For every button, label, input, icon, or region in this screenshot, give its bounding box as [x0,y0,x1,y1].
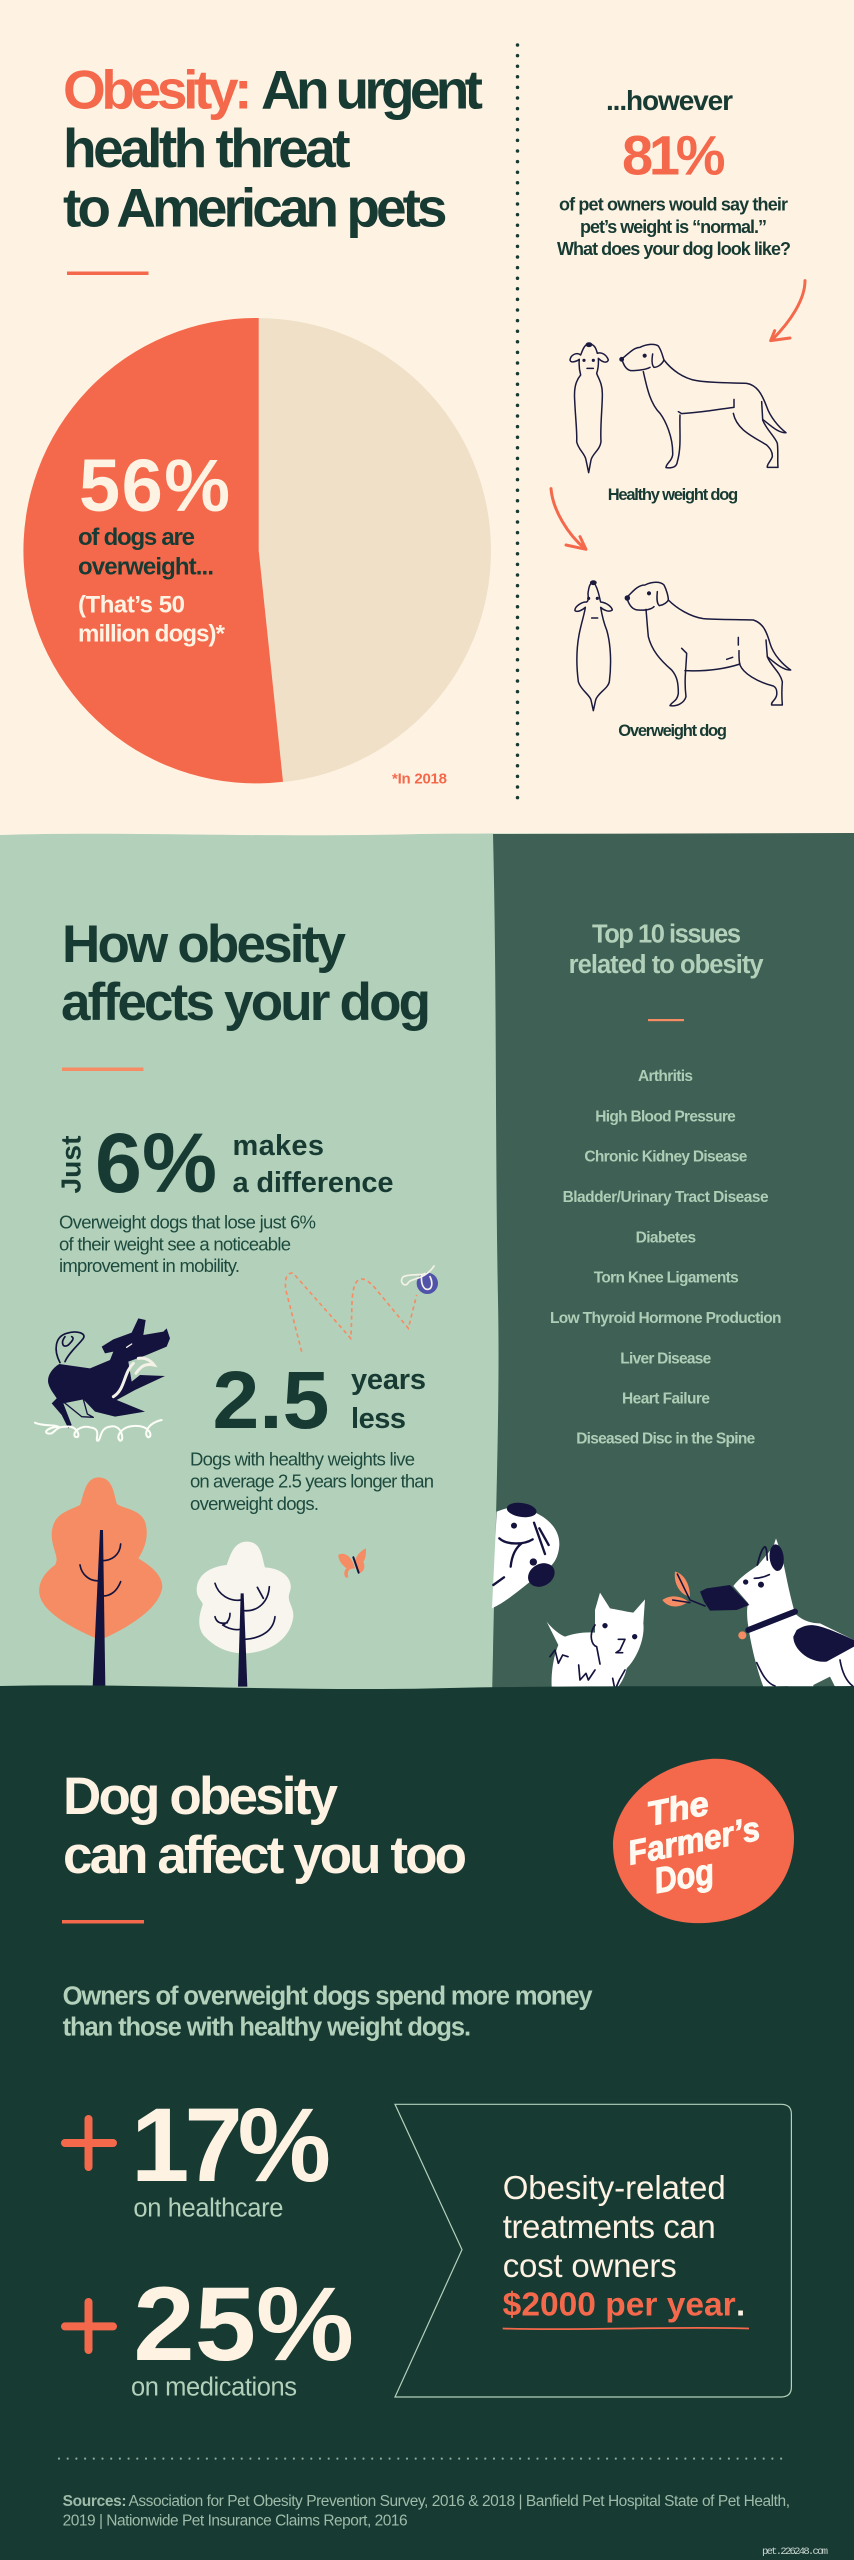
icon: overweight dog top view [575,581,612,711]
stat: +25 percent on medications: 25% [133,2266,354,2383]
icon: white cat [547,1593,645,1691]
panel: dog obesity can affect you too [0,1685,854,2560]
issues rule [648,1019,684,1021]
stat: +25 percent on medications: on medications [131,2374,297,2402]
stat: just 6 percent: Just [56,1136,86,1194]
body: 2.5 years: overweight dogs. [190,1493,319,1514]
watermark: pet.226248.com [762,2546,828,2558]
title [63,59,483,238]
title: An urgent [261,59,483,121]
sources: Association for Pet Obesity Prevention Survey, 2016 & 2018 | Banfield Pet Hospital State of Pet Health, [128,2493,790,2510]
heading rule [62,1068,144,1071]
stat: +17 percent on healthcare: on healthcare [133,2195,283,2223]
title rule [67,272,148,275]
issues list [550,1068,782,1448]
callout box: . [736,2286,745,2322]
pie callout text: of dogs are [78,524,195,551]
stat: +25 percent on medications [65,2266,354,2402]
footnote: *In 2018 [392,770,447,788]
icon: healthy dog side view [620,344,786,468]
body: 2.5 years: on average 2.5 years longer than [190,1471,434,1492]
issues list: Diseased Disc in the Spine [576,1431,756,1448]
issues list: Liver Disease [620,1350,712,1367]
issues list: Bladder/Urinary Tract Disease [563,1189,769,1206]
icon: cream tree [197,1542,293,1687]
however text: of pet owners would say their [559,195,788,215]
illustrations: dogs and cat [492,1501,854,1691]
subheading: Owners of overweight dogs spend more money [63,1982,593,2010]
stat: +17 percent on healthcare [65,2087,331,2223]
icon: squiggle ground [35,1420,162,1441]
subheading [63,1982,593,2042]
dotted divider [59,2458,784,2460]
logo: The Farmer's Dog: Farmer’s [625,1810,763,1873]
issues list: Arthritis [638,1068,693,1085]
caption: overweight dog: Overweight dog [618,722,727,740]
body: 6 percent: Overweight dogs that lose just 6% [59,1211,316,1232]
logo: The Farmer's Dog: The [644,1785,712,1834]
stat: just 6 percent: a difference [232,1167,394,1199]
issues list: Heart Failure [622,1390,710,1407]
title: health threat [63,117,351,179]
stat: 2.5 years less: 2.5 [212,1355,330,1446]
arrow: down to healthy dog [771,281,805,341]
callout box [395,2104,791,2397]
panel: how obesity affects your dog [0,833,854,1700]
pie callout text: 56% [79,444,230,527]
logo: The Farmer's Dog [613,1759,794,1923]
issues list: High Blood Pressure [595,1108,736,1125]
pie callout text: overweight... [78,553,214,580]
logo: The Farmer's Dog: Dog [651,1850,717,1901]
stat: 2.5 years less: years [351,1364,426,1396]
dashed ball path [285,1273,417,1352]
however text: 81% [622,124,726,187]
title: Obesity: [63,59,252,121]
icon: jumping dog [48,1318,170,1428]
pie callout text: (That’s 50 [78,592,185,618]
sources [63,2493,790,2530]
body: 6 percent: of their weight see a noticeable [59,1234,291,1255]
heading [63,1767,467,1885]
illustrations: left scene [35,1266,438,1687]
panel: top 10 issues [492,833,854,1700]
heading: affects your dog [61,973,431,1032]
issues heading: related to obesity [569,951,764,979]
heading [61,915,431,1032]
however text: What does your dog look like? [557,239,791,259]
dotted divider [516,45,519,806]
stat: just 6 percent [56,1116,394,1210]
caption: healthy weight dog: Healthy weight dog [608,486,738,504]
stat: 2.5 years less [212,1355,426,1446]
stat: 2.5 years less: less [351,1403,406,1435]
issues list: Diabetes [636,1229,696,1246]
icon: healthy dog top view [570,343,608,473]
icon: orange tree [39,1477,162,1687]
issues list: Chronic Kidney Disease [584,1148,748,1165]
body: 2.5 years: Dogs with healthy weights live [190,1448,415,1470]
callout box: cost owners [503,2247,677,2284]
sources: 2019 | Nationwide Pet Insurance Claims Report, 2016 [63,2512,408,2530]
callout box: Obesity-related [503,2169,726,2206]
subheading: than those with healthy weight dogs. [63,2014,471,2042]
title: to American pets [63,176,448,238]
body: 2.5 years [190,1448,434,1514]
issues list: Torn Knee Ligaments [594,1269,739,1286]
body: 6 percent: improvement in mobility. [59,1255,240,1276]
dog illustrations [551,281,805,711]
however text: pet’s weight is “normal.” [580,217,767,237]
sources: Sources: [63,2493,127,2510]
heading: How obesity [62,915,347,974]
however text [557,85,791,259]
arrow: down to overweight dog [551,489,586,549]
pie callout text [78,444,230,648]
stat: just 6 percent: 6% [95,1116,217,1210]
stat: +17 percent on healthcare: 17% [131,2087,331,2204]
icon: dog with branch [662,1538,854,1687]
callout box: treatments can [503,2208,716,2245]
icon: butterfly [338,1548,366,1578]
issues heading: Top 10 issues [592,921,741,949]
body: 6 percent [59,1211,316,1276]
pie chart: 56 percent of dogs overweight [23,318,491,784]
issues heading [569,921,764,979]
issues list: Low Thyroid Hormone Production [550,1310,782,1327]
however text: ...however [606,85,733,116]
icon: peeking pug [492,1501,559,1608]
heading: can affect you too [63,1826,467,1885]
heading rule [62,1920,144,1924]
stat: just 6 percent: makes [232,1130,324,1162]
callout box: $2000 per year [503,2286,736,2322]
icon: ball [402,1266,438,1294]
heading: Dog obesity [63,1767,339,1826]
panel: obesity intro [0,0,854,850]
icon: overweight dog side view [625,582,791,706]
pie callout text: million dogs)* [78,621,226,648]
